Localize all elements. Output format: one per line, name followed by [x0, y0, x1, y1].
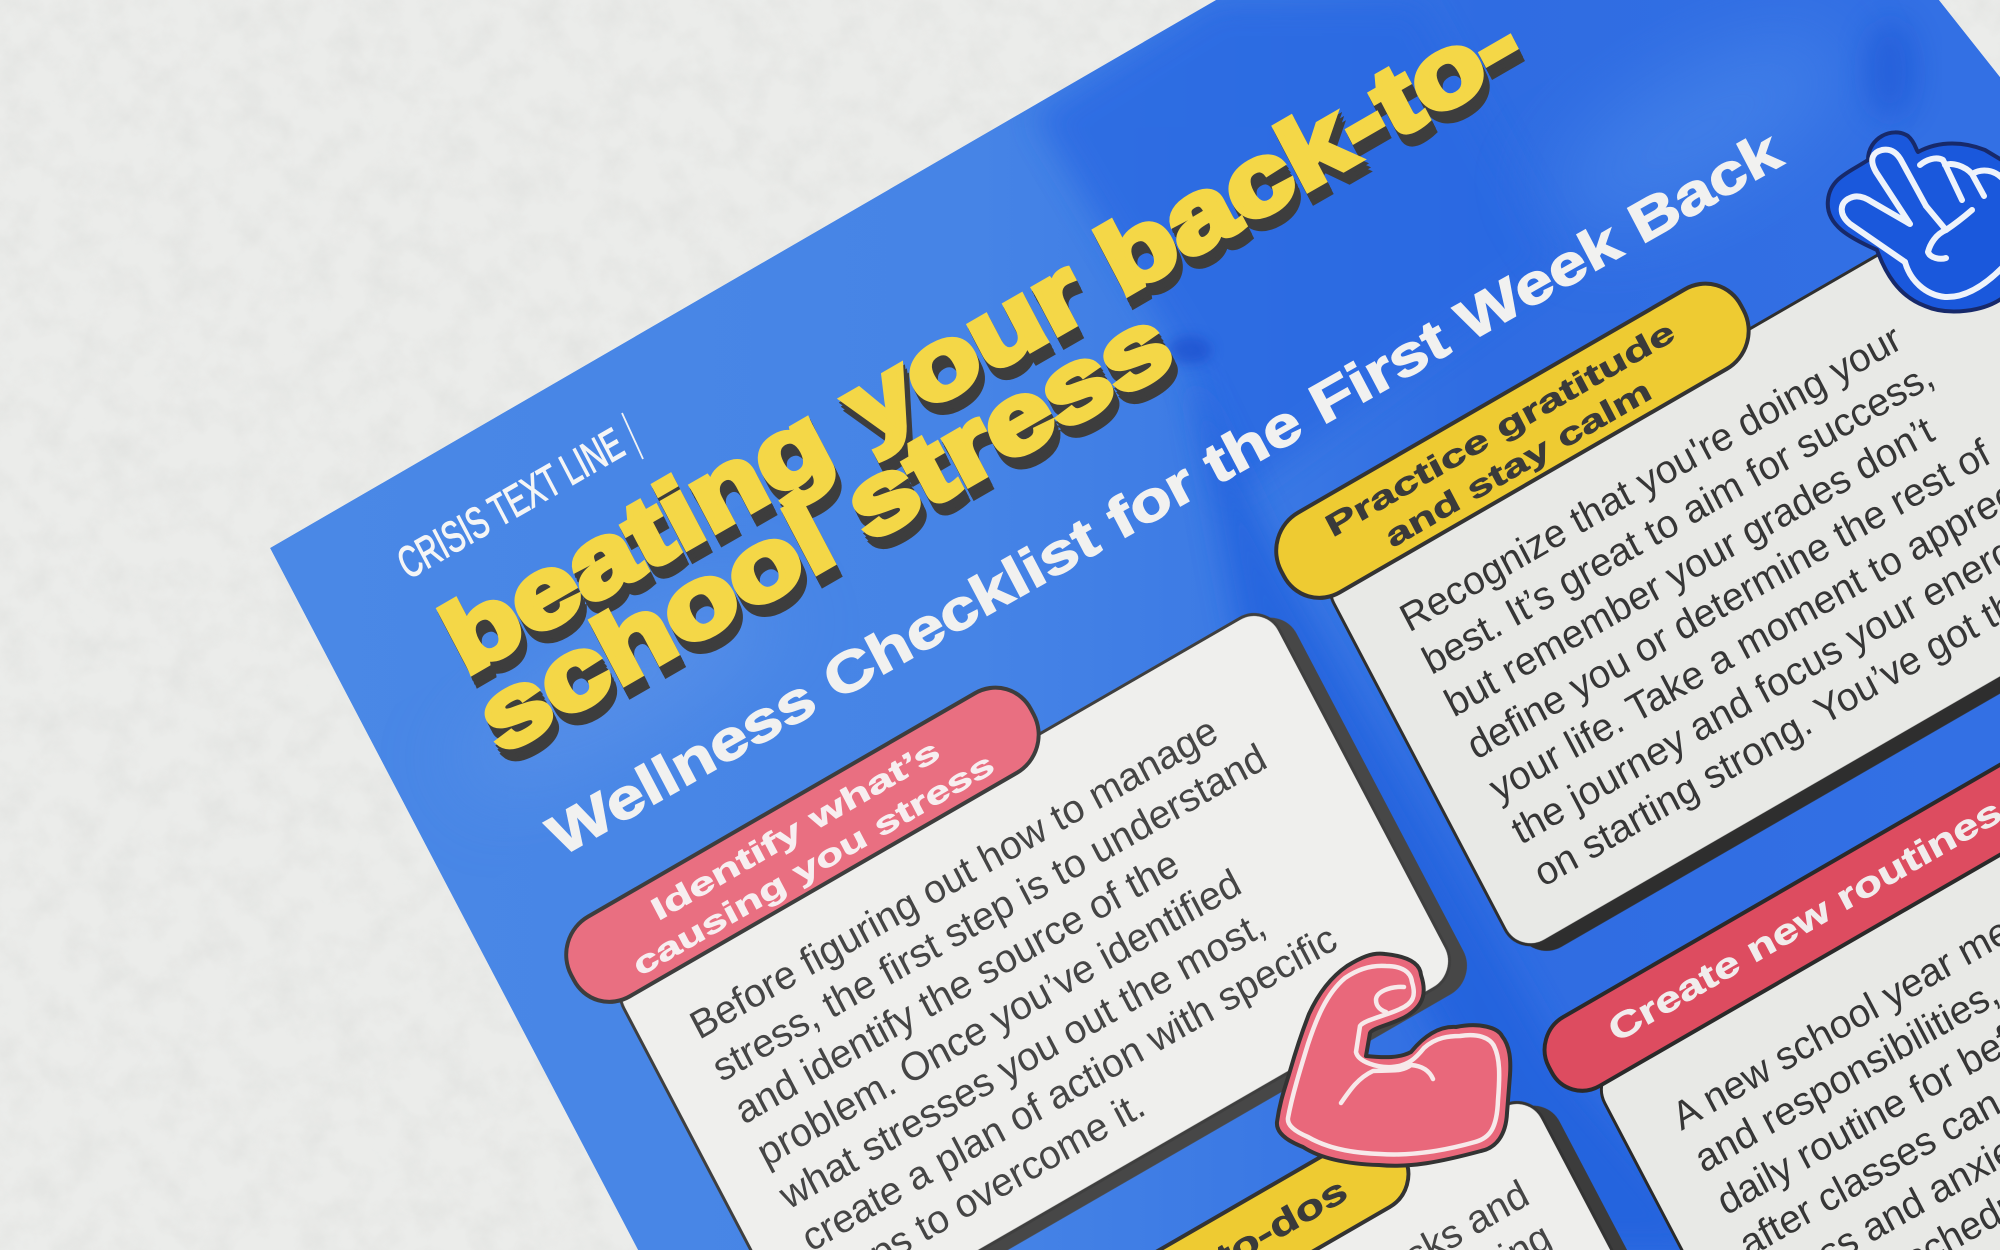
body text: practice gratitude: Recognize that you're doing your	[1393, 317, 1908, 641]
body text: practice gratitude: best. It’s great to aim for success,	[1416, 354, 1941, 683]
title	[425, 0, 1537, 774]
pill: create routines	[1532, 735, 2000, 1104]
panel: practice gratitude	[1320, 147, 2000, 956]
body text: identify stress	[682, 693, 1385, 1250]
body text: practice gratitude: define you or determine the rest of	[1460, 432, 1997, 768]
brand: Crisis Text Line: CRISIS TEXT LINE	[390, 419, 632, 589]
pill: identify stress: Identify what’s	[645, 732, 945, 927]
body text: practice gratitude: but remember your grades don’t	[1438, 409, 1941, 726]
subtitle: Wellness Checklist for the First Week Back	[537, 118, 1792, 868]
body text: identify stress: problem. Once you’ve identified	[750, 861, 1248, 1175]
brand: Crisis Text Line	[390, 413, 643, 589]
panel: prioritize to-dos	[873, 1092, 1723, 1250]
panel: identify stress	[610, 604, 1460, 1250]
icon: peace hand	[1828, 132, 2000, 311]
body text: identify stress: what stresses you out the most,	[771, 902, 1272, 1218]
pill: identify stress: causing you stress	[627, 746, 1000, 983]
card: practice gratitude	[1320, 147, 2000, 956]
body text: practice gratitude	[1393, 271, 2000, 896]
body text: identify stress: stress, the first step is to understand	[705, 735, 1274, 1091]
body text: identify stress: Before figuring out how to manage	[683, 708, 1225, 1048]
title: school stress	[460, 285, 1188, 774]
title: beating your back-to-	[425, 0, 1537, 695]
pill: identify stress	[552, 672, 1053, 1017]
icon: flexed muscle	[1277, 954, 1510, 1166]
card: create routines	[1591, 647, 2000, 1250]
pill: practice gratitude	[1262, 268, 1763, 613]
body text: identify stress: and identify the source of the	[728, 841, 1186, 1133]
card: identify stress	[610, 604, 1460, 1250]
pill: practice gratitude: Practice gratitude	[1320, 314, 1680, 544]
panel: create routines	[1591, 647, 2000, 1250]
pill: create routines: Create new routines	[1602, 791, 2000, 1050]
pill: practice gratitude: and stay calm	[1379, 372, 1657, 554]
pill: prioritize to-dos	[866, 1120, 1421, 1250]
card: prioritize to-dos	[873, 1092, 1723, 1250]
